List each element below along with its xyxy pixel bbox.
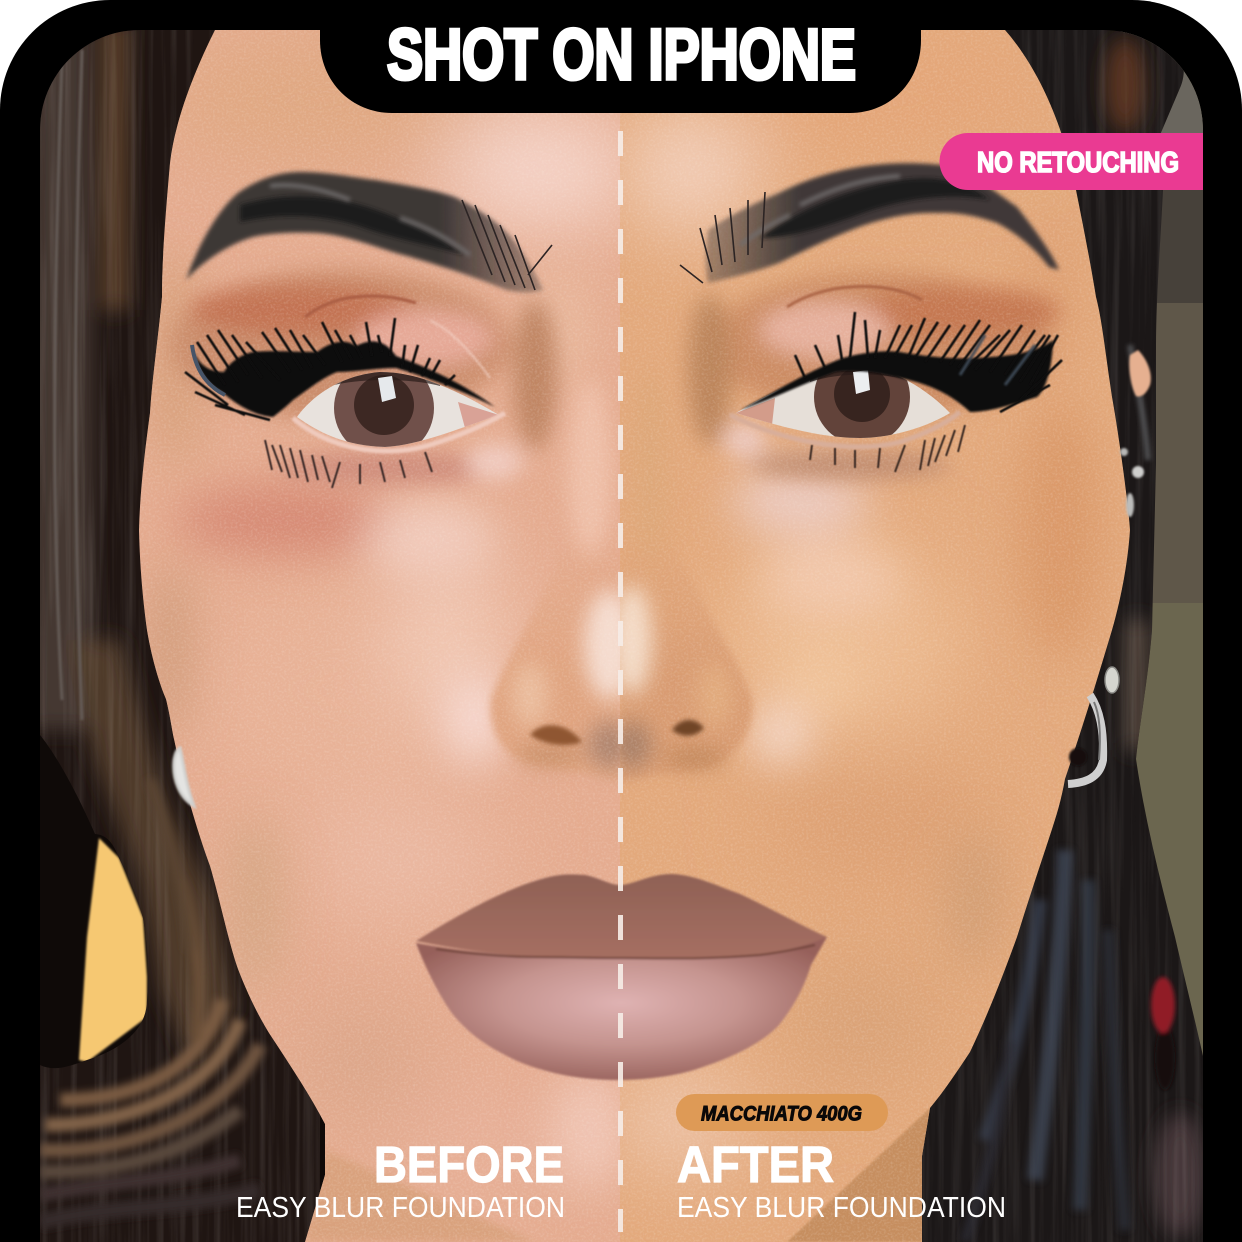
eyebrow right <box>680 163 1059 283</box>
right eye socket shadow <box>680 266 1065 491</box>
lower lip <box>416 937 827 1080</box>
neck shadows <box>305 1108 930 1242</box>
badge: macchiato 400g shade: MACCHIATO 400G <box>701 1102 862 1126</box>
left hair strands <box>40 780 260 1222</box>
left crease <box>305 296 416 317</box>
right eye <box>730 287 1062 472</box>
earring right <box>1068 667 1119 784</box>
left nose side <box>486 585 620 781</box>
left eye socket shadow <box>170 270 612 560</box>
right lower lashes <box>810 425 965 472</box>
ear top right <box>1120 350 1151 517</box>
left eye <box>185 296 505 488</box>
center dashed divider <box>618 130 623 1232</box>
right half of face, after <box>610 0 1140 1242</box>
left upper lashes <box>194 341 495 417</box>
skin grain <box>130 30 1140 1242</box>
hair right <box>900 30 1206 1242</box>
right upper lashes <box>740 340 1053 412</box>
lamp glow <box>79 838 147 1062</box>
label: before <box>236 1136 565 1224</box>
earring left <box>174 748 194 806</box>
badge: no retouching: NO RETOUCHING <box>977 147 1179 179</box>
label: after <box>677 1136 1006 1224</box>
label: before: BEFORE <box>374 1136 564 1193</box>
right hair strands <box>965 850 1125 1242</box>
nostrils <box>530 720 704 745</box>
header tab <box>320 0 921 113</box>
upper lip <box>416 874 827 959</box>
right nose side <box>620 578 756 781</box>
badge: macchiato 400g shade <box>676 1094 888 1131</box>
right crease <box>787 287 922 307</box>
left half of face, before <box>139 30 620 1242</box>
label: before: EASY BLUR FOUNDATION <box>236 1192 565 1224</box>
title: shot on iphone: SHOT ON IPHONE <box>387 16 856 95</box>
label: after: AFTER <box>677 1136 834 1193</box>
label: after: EASY BLUR FOUNDATION <box>677 1192 1006 1224</box>
left lower lashes <box>265 440 432 488</box>
badge: no retouching <box>940 133 1203 190</box>
eyebrow left <box>186 172 552 292</box>
lips <box>416 874 827 1080</box>
hair left <box>40 30 320 1242</box>
